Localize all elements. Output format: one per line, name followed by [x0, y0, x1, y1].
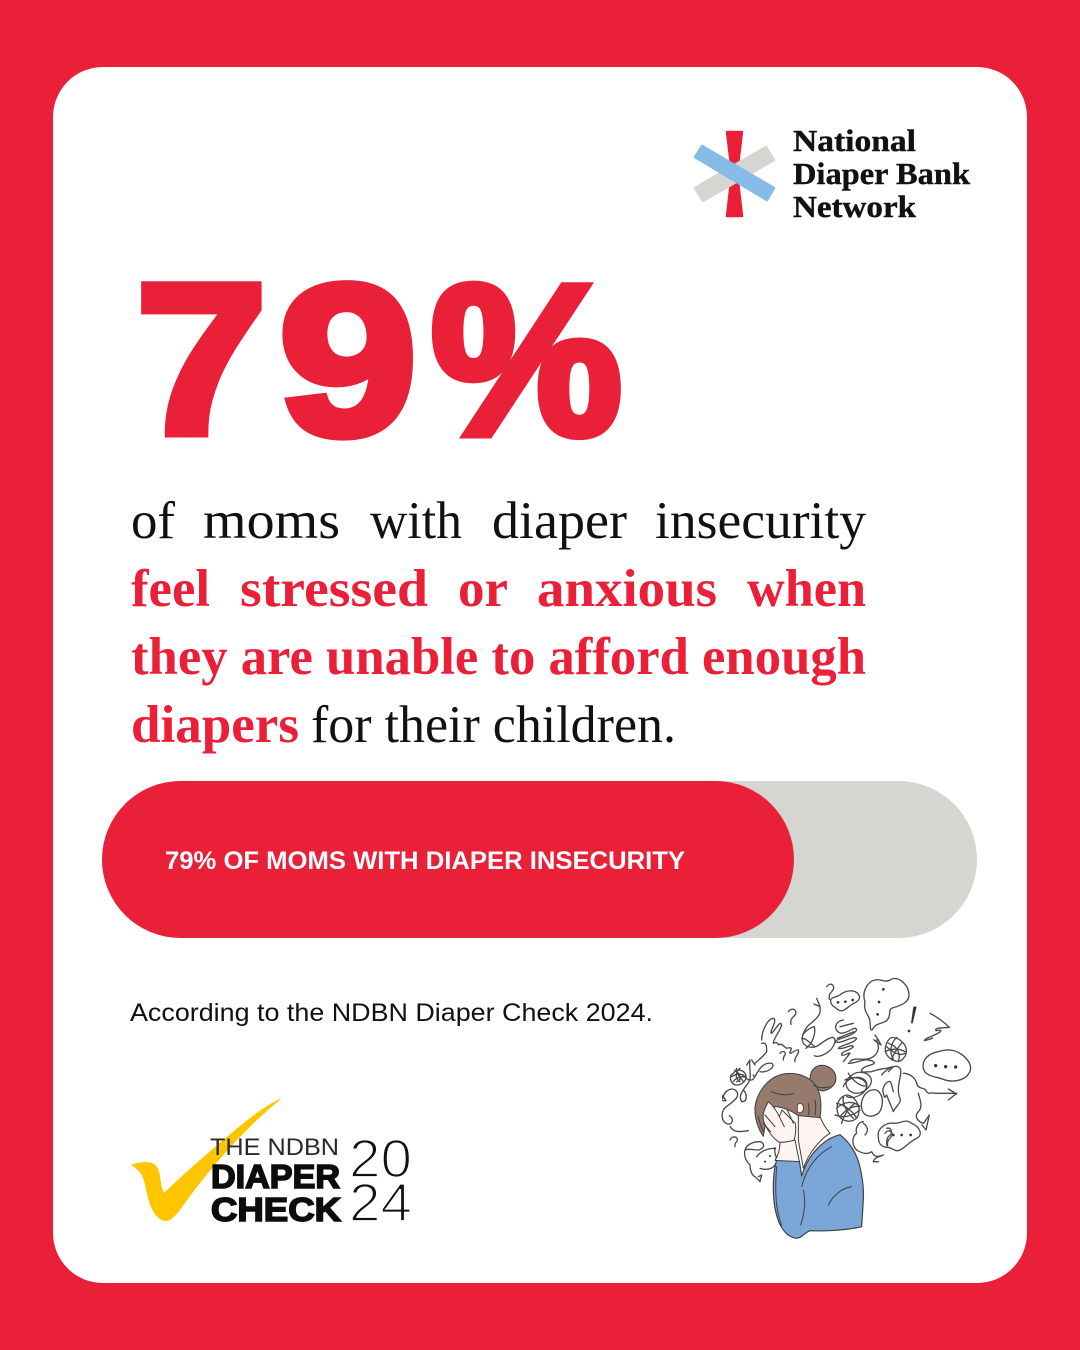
finger lines — [763, 1110, 793, 1132]
bar label: 79% OF MOMS WITH DIAPER INSECURITY — [165, 847, 685, 875]
neck skin — [798, 1115, 830, 1168]
big statistic: 79% — [136, 240, 622, 480]
hair bun — [810, 1065, 836, 1091]
line 1: with — [370, 492, 462, 550]
line 2: anxious — [537, 560, 717, 618]
hair — [755, 1073, 821, 1136]
line 2: stressed — [240, 560, 428, 618]
logo year: 24 — [349, 1173, 412, 1233]
line 2 — [131, 560, 866, 618]
line 3: they are unable to afford enough — [131, 628, 866, 686]
line 4: for their children. — [311, 696, 676, 754]
logo year — [349, 1129, 412, 1233]
icon: asterisk mark — [695, 132, 774, 216]
hair strands — [758, 1085, 830, 1132]
line 2: feel — [131, 560, 210, 618]
logo bold wordmark — [211, 1158, 341, 1228]
line 4 — [131, 696, 676, 754]
illustration: stressed woman with tangled thoughts — [722, 979, 971, 1238]
bar fill — [102, 781, 794, 938]
logo wordmark: Diaper Bank — [793, 156, 971, 191]
hand on face — [763, 1102, 796, 1142]
line 2: when — [747, 560, 866, 618]
sweater — [773, 1135, 863, 1238]
logo: National Diaper Bank Network — [695, 123, 971, 224]
scribbled thoughts — [722, 979, 971, 1182]
progress bar: 79 percent — [102, 781, 977, 938]
logo bold wordmark: CHECK — [211, 1191, 341, 1228]
big statistic: 79%: % — [431, 241, 622, 480]
logo bold wordmark: DIAPER — [211, 1158, 340, 1195]
statement text block — [131, 492, 867, 754]
logo small heading: THE NDBN — [210, 1134, 339, 1161]
line 2: or — [458, 560, 508, 618]
big statistic: 79%: 9 — [279, 241, 417, 480]
source note: According to the NDBN Diaper Check 2024. — [130, 999, 653, 1027]
thought marks — [764, 988, 957, 1163]
line 1 — [131, 492, 867, 550]
logo wordmark: Network — [793, 189, 917, 224]
logo: The NDBN Diaper Check 2024 — [131, 1098, 412, 1233]
icon: yellow check mark — [131, 1098, 282, 1221]
line 4: diapers — [131, 696, 299, 754]
sweater fold lines — [776, 1147, 852, 1225]
line 1: moms — [203, 492, 340, 550]
line 1: insecurity — [655, 492, 867, 550]
arm skin — [775, 1140, 799, 1162]
logo wordmark: National — [793, 123, 916, 158]
bar track — [102, 781, 977, 938]
logo year: 20 — [349, 1129, 412, 1189]
ear — [797, 1103, 803, 1113]
logo wordmark — [793, 123, 971, 224]
big statistic: 79%: 7 — [136, 240, 267, 479]
line 1: diaper — [492, 492, 627, 550]
line 1: of — [131, 492, 175, 550]
